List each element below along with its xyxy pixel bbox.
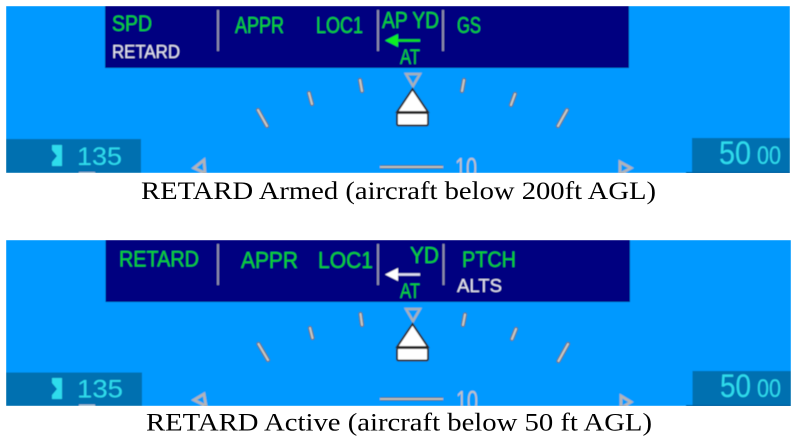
annunciator bar: ALTS (457, 276, 502, 296)
icon: aircraft symbol (397, 74, 428, 126)
annunciator bar: AT (400, 46, 420, 69)
pitch line and 10 label: 10 (455, 153, 477, 185)
speed readout (6, 139, 141, 174)
side bank markers (194, 394, 631, 408)
sky background (6, 240, 791, 406)
annunciator bar: APPR (241, 247, 298, 273)
annunciator bar: AT (400, 280, 420, 303)
annunciator bar (106, 240, 630, 303)
annunciator bar: SPD (112, 11, 152, 36)
altitude readout (686, 135, 790, 174)
pitch line and 10 label: 10 (456, 386, 478, 418)
annunciator bar: RETARD (119, 246, 199, 272)
bank scale ticks (258, 80, 567, 126)
annunciator bar (105, 6, 629, 69)
annunciator bar: LOC1 (318, 247, 373, 273)
altitude readout (686, 368, 791, 406)
sky background (6, 6, 790, 173)
annunciator bar: YD (410, 242, 439, 268)
icon: aircraft symbol (397, 309, 428, 360)
altitude readout: 50 (720, 368, 751, 404)
speed readout: 135 (77, 143, 122, 171)
arrow: green armed (385, 34, 420, 47)
panel: RETARD active display (6, 240, 791, 418)
altitude readout: 00 (757, 375, 781, 403)
annunciator bar: AP YD (382, 7, 439, 33)
bank scale ticks (258, 314, 568, 361)
annunciator bar: APPR (235, 12, 284, 38)
annunciator bar: GS (457, 12, 481, 38)
pitch line and 10 label (379, 156, 478, 173)
panel: RETARD armed display (6, 6, 790, 185)
arrow: white active (385, 268, 420, 281)
side bank markers (194, 160, 631, 174)
speed readout: 135 (77, 376, 123, 404)
altitude readout: 00 (757, 142, 781, 170)
annunciator bar: LOC1 (316, 12, 363, 38)
annunciator bar: RETARD (112, 42, 180, 62)
caption: RETARD active: RETARD Active (aircraft below 50 ft AGL) (146, 410, 652, 436)
altitude readout: 50 (719, 135, 751, 171)
caption: RETARD armed: RETARD Armed (aircraft below 200ft AGL) (141, 178, 656, 205)
annunciator bar: PTCH (462, 247, 516, 272)
pitch line and 10 label (379, 390, 478, 406)
speed readout (6, 372, 142, 406)
